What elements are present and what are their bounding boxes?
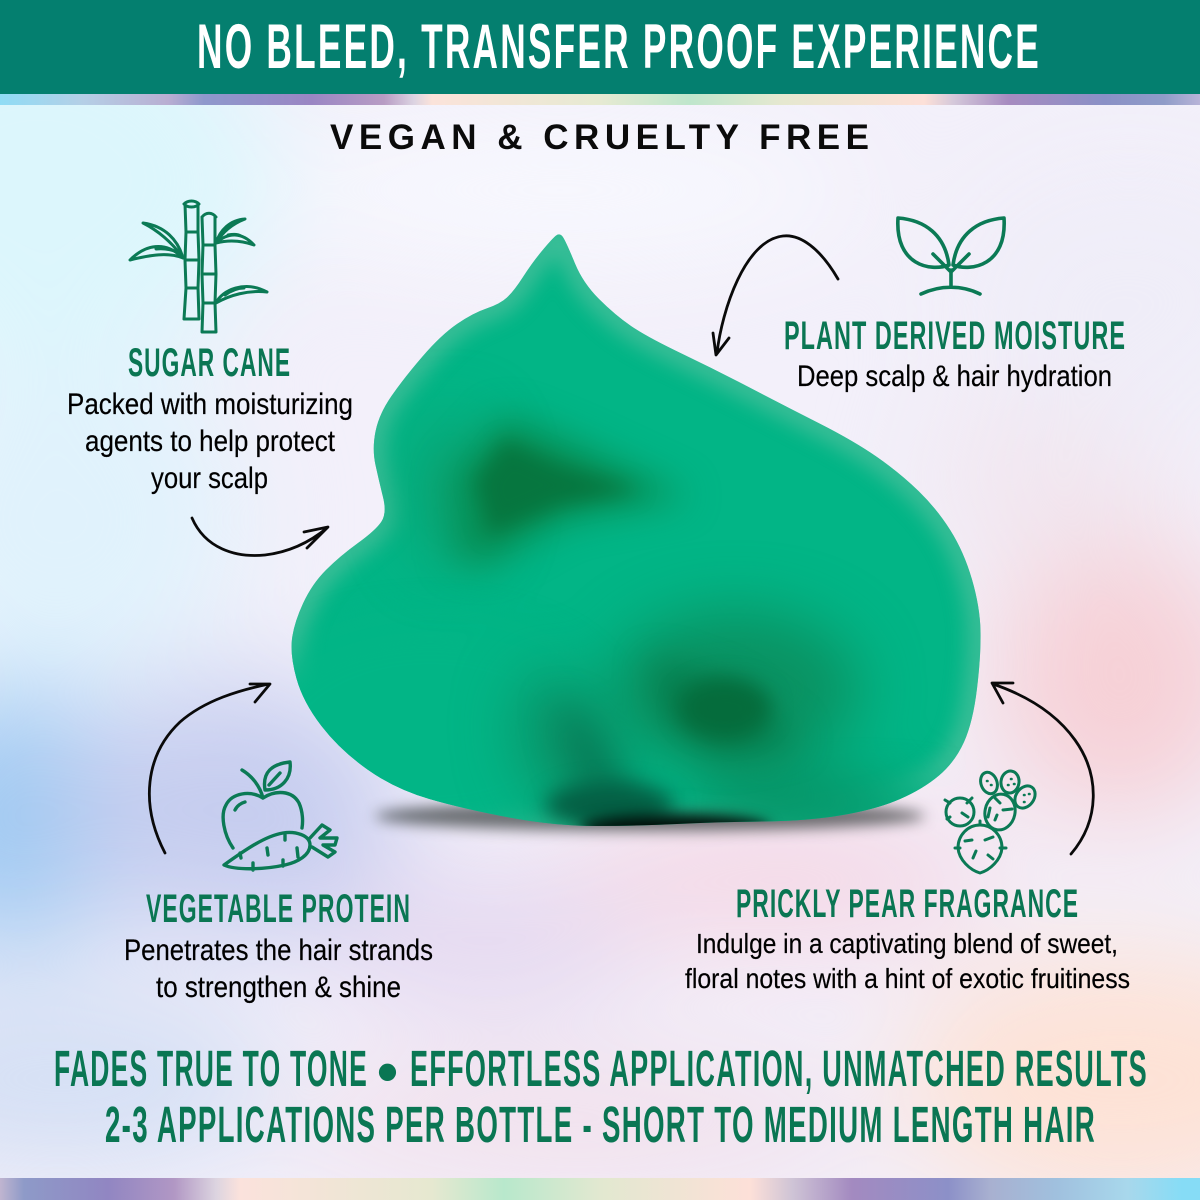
product: green foam blob: [292, 234, 981, 842]
body: vegetable protein: [124, 934, 433, 1004]
header banner: [0, 0, 1200, 94]
body: prickly pear fragrance: Indulge in a captivating blend of sweet,: [696, 928, 1118, 959]
icon: plant sprout: [898, 218, 1004, 294]
body: sugar cane: agents to help protect: [85, 425, 336, 458]
arrow: sugar cane to foam: [192, 518, 328, 556]
body: sugar cane: your scalp: [151, 462, 268, 495]
arrow: plant moisture to foam: [713, 236, 838, 355]
footer claims: •: [377, 1038, 400, 1105]
heading: vegetable protein: VEGETABLE PROTEIN: [146, 887, 411, 931]
ground shadow: [375, 801, 925, 831]
subtitle: VEGAN & CRUELTY FREE: [330, 118, 869, 157]
panel: vegetable protein: [124, 684, 433, 1004]
arrow: prickly pear to foam: [992, 683, 1093, 854]
body: sugar cane: [67, 388, 353, 495]
body: vegetable protein: to strengthen & shine: [156, 971, 401, 1004]
panel: plant derived moisture: [713, 218, 1126, 393]
body: prickly pear fragrance: [685, 928, 1130, 994]
body: prickly pear fragrance: floral notes with a hint of exotic fruitiness: [685, 963, 1130, 994]
arrow: vegetable protein to foam: [149, 684, 270, 853]
bottom iridescent strip: [0, 1178, 1200, 1200]
panel: prickly pear fragrance: [685, 683, 1130, 994]
body: plant derived moisture: Deep scalp & hair hydration: [797, 360, 1112, 393]
heading: sugar cane: SUGAR CANE: [128, 341, 291, 385]
panel: sugar cane: [67, 201, 353, 556]
icon: apple and carrot: [223, 762, 337, 870]
body: vegetable protein: Penetrates the hair strands: [124, 934, 433, 967]
footer claims: FADES TRUE TO TONE: [54, 1040, 368, 1097]
top iridescent strip: [0, 94, 1200, 105]
icon: prickly pear cactus: [945, 770, 1039, 873]
body: sugar cane: Packed with moisturizing: [67, 388, 353, 421]
icon: bamboo: [130, 201, 267, 332]
footer claims: [54, 1038, 1148, 1153]
